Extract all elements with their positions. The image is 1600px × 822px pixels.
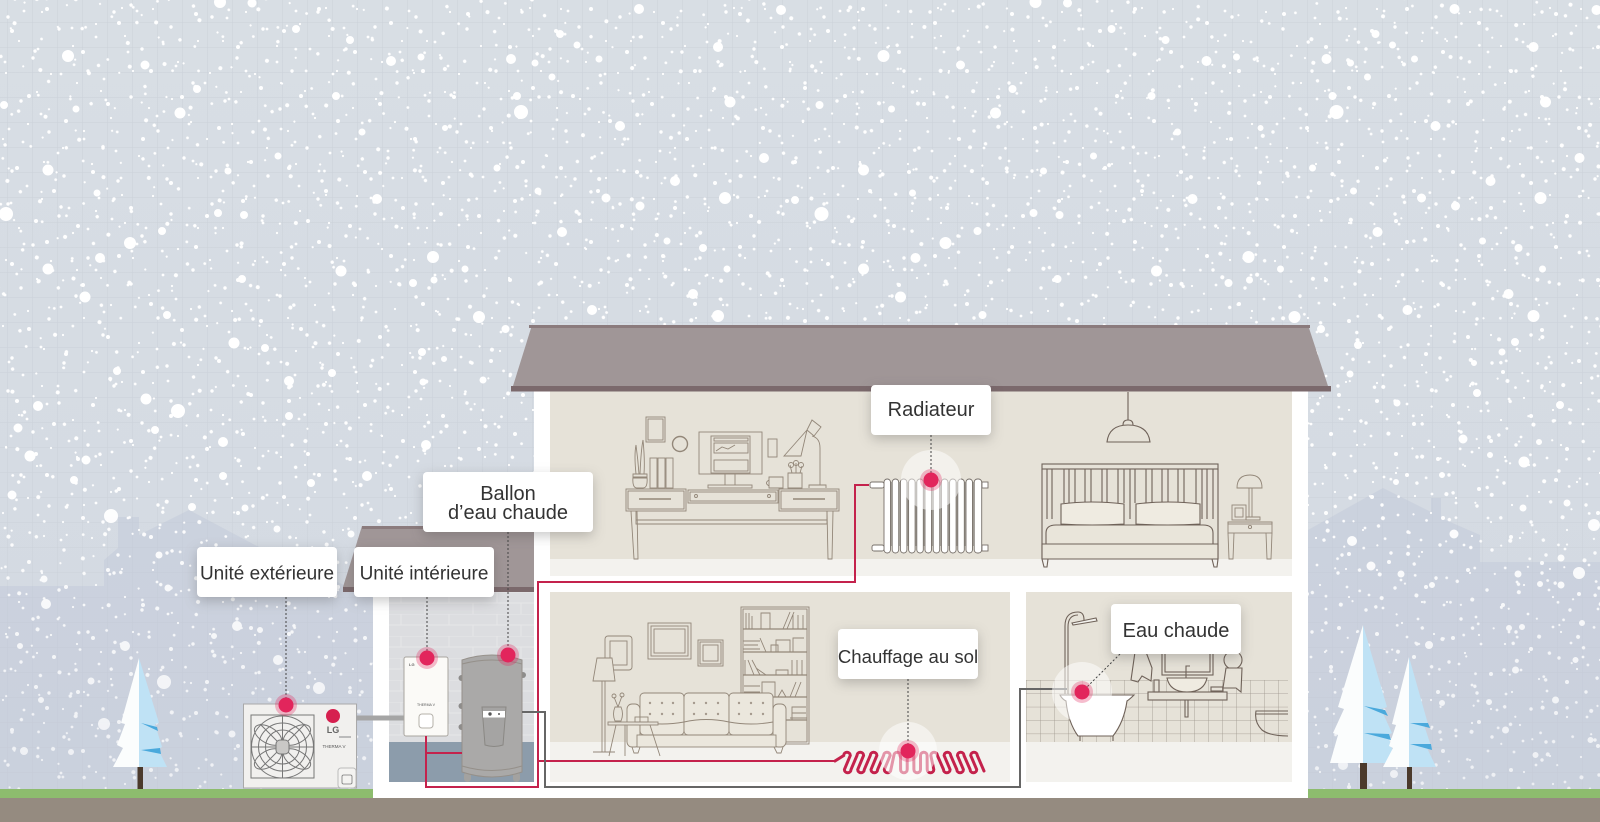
pin: radiator — [920, 469, 942, 491]
label: Ballon d'eau chaude: Ballon — [480, 483, 536, 505]
faded houses, right — [1308, 488, 1600, 790]
label: Unité extérieure: Unité extérieure — [200, 564, 334, 584]
illustration: wall frames — [605, 623, 723, 670]
illustration: toilet — [1256, 711, 1288, 736]
label: Ballon d'eau chaude — [423, 472, 593, 532]
indoor unit — [404, 657, 448, 736]
room: bathroom — [1026, 592, 1292, 782]
tree right small — [1383, 657, 1436, 789]
illustration: bath tub — [1060, 695, 1134, 741]
pin: tank — [497, 644, 519, 666]
label: Unité intérieure: Unité intérieure — [360, 564, 488, 584]
pin: hot water — [1071, 681, 1093, 703]
model label: THERMA V — [322, 744, 346, 749]
ground: grass left — [0, 789, 373, 798]
faded houses, left — [0, 510, 373, 790]
illustration: side table and vase — [608, 693, 660, 756]
outdoor unit — [244, 704, 356, 788]
indoor unit: LG — [409, 662, 415, 667]
indoor unit: THERMA V — [417, 703, 436, 707]
pipe: floor heating coil — [835, 752, 984, 773]
fan grille — [251, 715, 314, 778]
label: Chauffage au sol — [838, 629, 978, 679]
label: Eau chaude — [1111, 604, 1241, 654]
label: Radiateur — [871, 385, 991, 435]
pipe: domestic hot water (grey) — [522, 689, 1067, 787]
pin: floor heating — [897, 740, 919, 762]
illustration: floor lamp — [593, 658, 615, 752]
pipe: hot circuit (red) — [426, 485, 869, 787]
illustration: sink and mirror — [1148, 650, 1227, 717]
illustration: nightstand and lamp — [1228, 475, 1272, 559]
hot water tank — [458, 655, 526, 782]
annex building — [343, 526, 538, 798]
label: Radiateur: Radiateur — [888, 399, 975, 421]
main house shell — [511, 325, 1331, 798]
label: Chauffage au sol: Chauffage au sol — [838, 646, 978, 667]
illustration: sofa — [627, 693, 786, 753]
illustration: bed — [1042, 464, 1218, 567]
illustration: bathroom tiles — [1026, 680, 1288, 742]
illustration: desk — [626, 417, 839, 559]
LG logo: LG — [327, 725, 339, 735]
label: Ballon d'eau chaude: d’eau chaude — [448, 502, 568, 524]
illustration: towels — [1131, 651, 1242, 692]
tree right large — [1330, 625, 1396, 789]
label: Unité extérieure — [197, 547, 337, 597]
ground: grass right — [1308, 789, 1600, 798]
pin: outdoor unit — [275, 694, 297, 716]
pin: indoor unit — [416, 647, 438, 669]
label: Unité intérieure — [354, 547, 494, 597]
illustration: radiator — [870, 479, 988, 553]
room: living room — [550, 592, 1010, 782]
illustration: shower — [1065, 612, 1097, 694]
leader lines — [286, 435, 1120, 751]
tree left — [113, 658, 167, 789]
label: Eau chaude: Eau chaude — [1123, 620, 1229, 642]
illustration: pendant lamp — [1107, 392, 1150, 442]
refrigerant link — [356, 716, 405, 720]
ground: soil — [0, 798, 1600, 822]
halos — [879, 450, 1112, 780]
illustration: bookcase — [741, 607, 809, 744]
room: upstairs — [550, 392, 1292, 576]
pins — [275, 469, 1093, 762]
